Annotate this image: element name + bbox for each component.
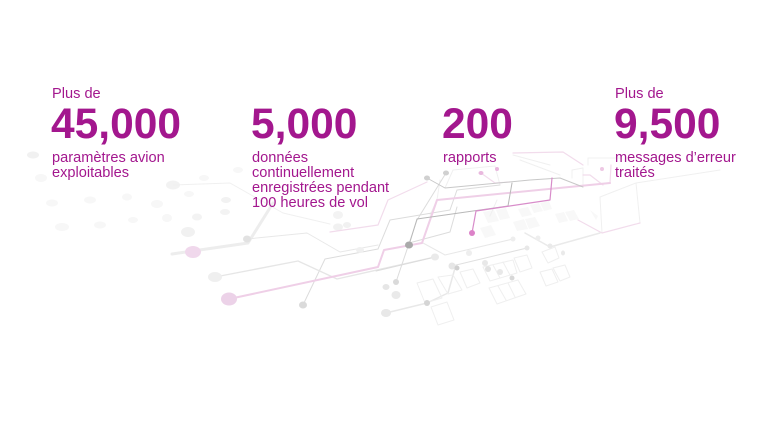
- faint parallelogram blocks: [480, 201, 598, 238]
- dark grey traces: [409, 178, 583, 245]
- description: exploitables: [52, 165, 129, 181]
- outlined blocks: [417, 247, 570, 325]
- description: 100 heures de vol: [252, 195, 368, 211]
- pink end node, upper: [185, 246, 201, 258]
- magenta trace: [472, 178, 552, 233]
- thin grey trace left: [247, 233, 378, 252]
- right grey trace: [525, 233, 600, 247]
- prefix: Plus de: [615, 86, 664, 102]
- main pink trace: [229, 183, 610, 299]
- prefix: Plus de: [52, 86, 101, 102]
- stat: 9,500: [614, 86, 736, 181]
- description: continuellement: [252, 165, 354, 181]
- description: traités: [615, 165, 655, 181]
- light pink upper traces: [330, 152, 640, 233]
- stat: 200: [442, 101, 513, 166]
- nodes: [185, 167, 604, 317]
- pink end node, lower: [221, 292, 237, 306]
- description: rapports: [443, 150, 497, 166]
- medium grey traces: [215, 173, 527, 305]
- description: messages d’erreur: [615, 150, 736, 166]
- lower grey trace: [386, 268, 455, 313]
- magenta end node: [469, 230, 475, 236]
- description: enregistrées pendant: [252, 180, 389, 196]
- description: paramètres avion: [52, 150, 165, 166]
- circuit network background: [27, 152, 720, 325]
- stat: 5,000: [251, 101, 389, 211]
- grey end nodes: [208, 272, 222, 282]
- number: 45,000: [51, 101, 181, 148]
- number: 200: [442, 101, 513, 148]
- dark junction node: [405, 242, 413, 248]
- scattered faint dots: [27, 152, 351, 237]
- stat: 45,000: [51, 86, 181, 181]
- description: données: [252, 150, 308, 166]
- thick grey trace left: [172, 203, 273, 254]
- number: 5,000: [251, 101, 357, 148]
- number: 9,500: [614, 101, 720, 148]
- light upper grey traces: [173, 155, 720, 233]
